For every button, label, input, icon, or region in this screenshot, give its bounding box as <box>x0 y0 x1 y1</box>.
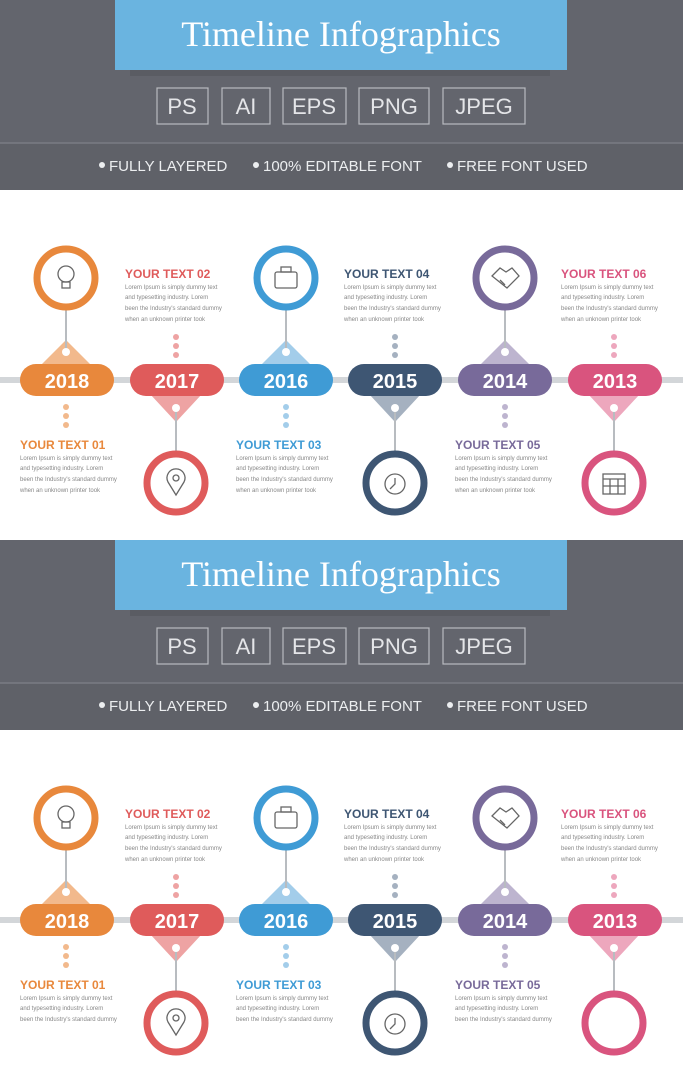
step 2018: been the Industry's standard dummy <box>20 1017 117 1023</box>
step 2015: YOUR TEXT 04 <box>344 807 430 821</box>
step 2013: 2013 <box>593 371 637 393</box>
title <box>115 540 567 610</box>
step 2018: YOUR TEXT 01 <box>20 438 106 452</box>
title: Timeline Infographics <box>181 14 501 54</box>
format boxes: EPS <box>292 634 336 659</box>
step 2014: Lorem Ipsum is simply dummy text <box>455 996 548 1002</box>
step 2017 <box>124 267 224 512</box>
step 2016: and typesetting industry. Lorem <box>236 466 319 472</box>
step 2013: YOUR TEXT 06 <box>561 807 647 821</box>
step 2018: YOUR TEXT 01 <box>20 978 106 992</box>
step 2018: and typesetting industry. Lorem <box>20 466 103 472</box>
format boxes: JPEG <box>455 634 513 659</box>
step 2017: Lorem Ipsum is simply dummy text <box>125 285 218 291</box>
step 2016: YOUR TEXT 03 <box>236 978 322 992</box>
step 2014: YOUR TEXT 05 <box>455 978 541 992</box>
step 2016: YOUR TEXT 03 <box>236 438 322 452</box>
step 2015: when an unknown printer took <box>343 317 425 323</box>
step 2016: Lorem Ipsum is simply dummy text <box>236 996 329 1002</box>
step 2014: been the Industry's standard dummy <box>455 1017 552 1023</box>
format boxes: PS <box>167 94 197 119</box>
step 2015: when an unknown printer took <box>343 857 425 863</box>
features: 100% EDITABLE FONT <box>263 698 422 715</box>
step 2016: 2016 <box>264 911 308 933</box>
features: 100% EDITABLE FONT <box>263 158 422 175</box>
format boxes: PNG <box>370 634 418 659</box>
step 2014 <box>454 249 552 494</box>
format boxes <box>157 88 525 124</box>
step 2013 <box>560 267 662 512</box>
step 2014 <box>455 789 552 1023</box>
step 2013: been the Industry's standard dummy <box>561 306 658 312</box>
step 2016 <box>236 789 333 1023</box>
step 2016 <box>235 249 333 494</box>
step 2016: and typesetting industry. Lorem <box>236 1006 319 1012</box>
step 2018: when an unknown printer took <box>19 488 101 494</box>
step 2017: and typesetting industry. Lorem <box>125 835 208 841</box>
step 2013: 2013 <box>593 911 637 933</box>
step 2017: YOUR TEXT 02 <box>125 267 211 281</box>
step 2013: when an unknown printer took <box>560 857 642 863</box>
step 2013: YOUR TEXT 06 <box>561 267 647 281</box>
step 2017: when an unknown printer took <box>124 857 206 863</box>
step 2014: and typesetting industry. Lorem <box>455 466 538 472</box>
step 2016: 2016 <box>264 371 308 393</box>
section 2 <box>0 540 683 1056</box>
step 2013: and typesetting industry. Lorem <box>561 835 644 841</box>
step 2018: 2018 <box>45 911 89 933</box>
format boxes <box>157 628 525 664</box>
format boxes: PNG <box>370 94 418 119</box>
step 2014: Lorem Ipsum is simply dummy text <box>455 456 548 462</box>
step 2013: Lorem Ipsum is simply dummy text <box>561 825 654 831</box>
step 2017: been the Industry's standard dummy <box>125 306 222 312</box>
features: FULLY LAYERED <box>109 158 228 175</box>
title: Timeline Infographics <box>181 554 501 594</box>
format boxes: AI <box>236 634 256 659</box>
step 2017: been the Industry's standard dummy <box>125 846 222 852</box>
banner <box>0 0 683 190</box>
step 2016: Lorem Ipsum is simply dummy text <box>236 456 329 462</box>
step 2014: YOUR TEXT 05 <box>455 438 541 452</box>
features: FULLY LAYERED <box>109 698 228 715</box>
step 2016: been the Industry's standard dummy <box>236 1017 333 1023</box>
section 1 <box>0 0 683 516</box>
step 2013: been the Industry's standard dummy <box>561 846 658 852</box>
step 2015: YOUR TEXT 04 <box>344 267 430 281</box>
step 2016: been the Industry's standard dummy <box>236 477 333 483</box>
step 2014: been the Industry's standard dummy <box>455 477 552 483</box>
step 2014: 2014 <box>483 911 528 933</box>
step 2015: Lorem Ipsum is simply dummy text <box>344 825 437 831</box>
format boxes: JPEG <box>455 94 513 119</box>
step 2015: and typesetting industry. Lorem <box>344 835 427 841</box>
step 2015 <box>343 267 442 512</box>
step 2013: and typesetting industry. Lorem <box>561 295 644 301</box>
step 2015: been the Industry's standard dummy <box>344 306 441 312</box>
step 2015: been the Industry's standard dummy <box>344 846 441 852</box>
step 2015: Lorem Ipsum is simply dummy text <box>344 285 437 291</box>
step 2018: 2018 <box>45 371 89 393</box>
format boxes: PS <box>167 634 197 659</box>
timeline axis <box>0 917 683 923</box>
step 2017: Lorem Ipsum is simply dummy text <box>125 825 218 831</box>
step 2018: and typesetting industry. Lorem <box>20 1006 103 1012</box>
step 2013: when an unknown printer took <box>560 317 642 323</box>
step 2018 <box>19 249 117 494</box>
step 2017: 2017 <box>155 371 199 393</box>
format boxes: AI <box>236 94 256 119</box>
step 2015: 2015 <box>373 371 417 393</box>
step 2014: 2014 <box>483 371 528 393</box>
step 2013: Lorem Ipsum is simply dummy text <box>561 285 654 291</box>
step 2018: been the Industry's standard dummy <box>20 477 117 483</box>
banner <box>0 540 683 730</box>
step 2015: 2015 <box>373 911 417 933</box>
step 2015: and typesetting industry. Lorem <box>344 295 427 301</box>
step 2017: and typesetting industry. Lorem <box>125 295 208 301</box>
step 2017 <box>124 807 224 1052</box>
step 2017: 2017 <box>155 911 199 933</box>
features <box>99 698 588 715</box>
format boxes: EPS <box>292 94 336 119</box>
step 2015 <box>343 807 442 1052</box>
step 2018 <box>20 789 117 1023</box>
timeline axis <box>0 377 683 383</box>
title <box>115 0 567 70</box>
step 2014: and typesetting industry. Lorem <box>455 1006 538 1012</box>
step 2018: Lorem Ipsum is simply dummy text <box>20 456 113 462</box>
step 2018: Lorem Ipsum is simply dummy text <box>20 996 113 1002</box>
step 2017: when an unknown printer took <box>124 317 206 323</box>
features <box>99 158 588 175</box>
step 2016: when an unknown printer took <box>235 488 317 494</box>
step 2014: when an unknown printer took <box>454 488 536 494</box>
step 2013 <box>560 807 662 1052</box>
features: FREE FONT USED <box>457 698 588 715</box>
features: FREE FONT USED <box>457 158 588 175</box>
step 2017: YOUR TEXT 02 <box>125 807 211 821</box>
